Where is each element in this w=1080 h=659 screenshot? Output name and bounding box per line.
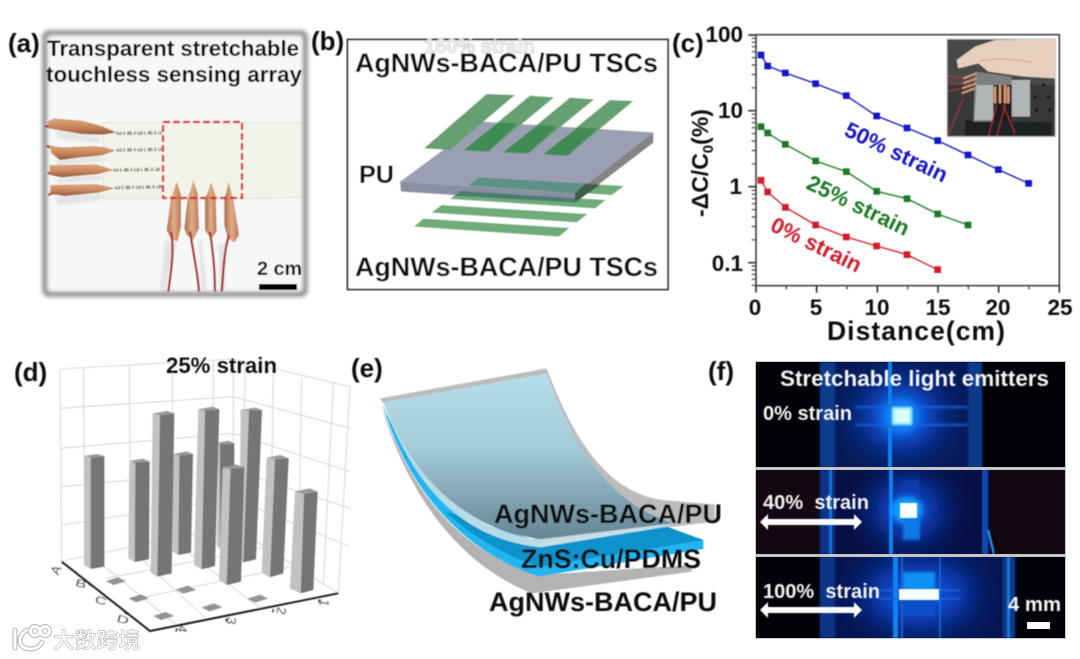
y tick labels [705,22,743,276]
label d: (d) [14,357,47,387]
clip shadows [55,130,225,290]
x tick labels: 20 [985,295,1011,320]
panel e: bent device layers [351,353,722,617]
label f: (f) [708,356,734,386]
top electrodes [424,94,633,156]
layer label top: AgNWs-BACA/PU [494,499,722,529]
axis letters: D [116,612,130,627]
scale label: 4 mm [1008,594,1061,616]
watermark logo [15,626,50,649]
x axis title: Distance(cm) [827,316,1005,346]
x tick labels: 25 [1047,295,1073,320]
axis letters: B [74,576,88,591]
scale bar [259,284,297,290]
base axes [62,562,338,631]
watermark [15,626,140,653]
axis letters: C [94,593,108,608]
y tick labels: 1 [729,174,742,199]
frame [348,40,668,290]
y tick labels: 10 [718,98,743,123]
bars back to front [84,407,318,593]
scale bar [1027,622,1050,629]
series: 25% strain [758,123,971,228]
top light-blue layer [383,373,673,539]
chart heading: 25% strain [166,353,277,378]
series: 50% strain [758,52,1032,187]
x tick labels: 10 [864,295,890,320]
series: 0% strain [758,177,941,273]
panel c: line chart [672,22,1073,346]
series label 50%: 50% strain [841,117,952,187]
y axis title: -ΔC/C [687,153,713,217]
layer diagram [400,94,653,237]
heading: Transparent stretchable [47,36,299,61]
photo frame [45,33,305,294]
grid walls [60,359,350,631]
row dividers [756,467,1065,470]
x tick labels: 5 [810,295,822,320]
left clips [48,118,117,135]
floor tiles for zero values [106,577,268,620]
y axis title: 0 [700,145,717,153]
plot drawn in scaled coordinates [748,35,1059,293]
axis letters: A [47,563,65,577]
label e: (e) [351,353,383,383]
photo frame [755,361,1066,639]
bottom electrodes [414,177,624,237]
y tick labels: 100 [705,22,743,47]
inset photo [947,39,1055,137]
layer label bottom: AgNWs-BACA/PU [489,587,717,617]
row label 40%: 40% strain [763,492,869,514]
row label 0%: 0% strain [763,403,852,425]
axis letters: 2 [273,606,289,616]
bottom clips [167,182,181,242]
top of blue layer [445,512,703,567]
red leads left [45,124,62,195]
panel a: photo of sensing array [8,28,305,294]
wires [168,232,229,292]
axis letters: 1 [316,598,332,608]
back gray layer [380,368,715,542]
panel f: light emitter photos [708,356,1066,639]
silver traces [113,133,162,188]
axis letters [47,563,332,634]
panel d: 3D bar chart [14,353,350,634]
grid and floor [60,359,350,631]
transparent film with electrodes and clips [45,118,302,292]
axis ticks [88,583,319,632]
x tick labels: 0 [749,295,761,320]
PU sheet [400,122,653,203]
watermark text: 大数跨境 [53,629,140,653]
label c: (c) [672,28,704,58]
bottom heading: AgNWs-BACA/PU TSCs [355,252,658,282]
x tick labels [749,295,1073,320]
x tick labels: 15 [925,295,951,320]
pale edge of top layer [383,402,540,547]
y tick labels: 0.1 [712,251,743,276]
series label 0%: 0% strain [767,212,866,277]
axis letters: 4 [174,624,190,634]
layered sheet [380,368,715,593]
photo heading: Stretchable light emitters [780,366,1049,391]
row 1 photo [756,362,1065,467]
bottom gray layer [380,402,692,593]
row 2 photo [756,470,1065,554]
axes [748,35,1059,293]
label a: (a) [8,28,40,58]
row 3 photo [756,557,1065,638]
overlap of bottom electrodes through sheet [455,177,600,203]
heading line 2: touchless sensing array [46,62,303,87]
layer label middle: ZnS:Cu/PDMS [521,544,701,574]
red dashed sensing region [163,122,242,198]
arrow 100% [760,602,862,618]
floor tiles and bars [62,407,338,632]
panel b: layered structure [311,26,668,290]
label b: (b) [311,26,344,56]
series label 25%: 25% strain [803,170,914,241]
y axis title: (%) [687,109,713,145]
emissive blue layer [382,404,703,577]
ghost caption: 160% strain [424,36,535,58]
row label 100%: 100% strain [763,581,880,603]
arrow 40% [760,514,862,530]
scale label: 2 cm [257,258,302,280]
top heading: AgNWs-BACA/PU TSCs [355,48,658,78]
axis letters: 3 [223,616,239,626]
PU label: PU [359,161,394,189]
